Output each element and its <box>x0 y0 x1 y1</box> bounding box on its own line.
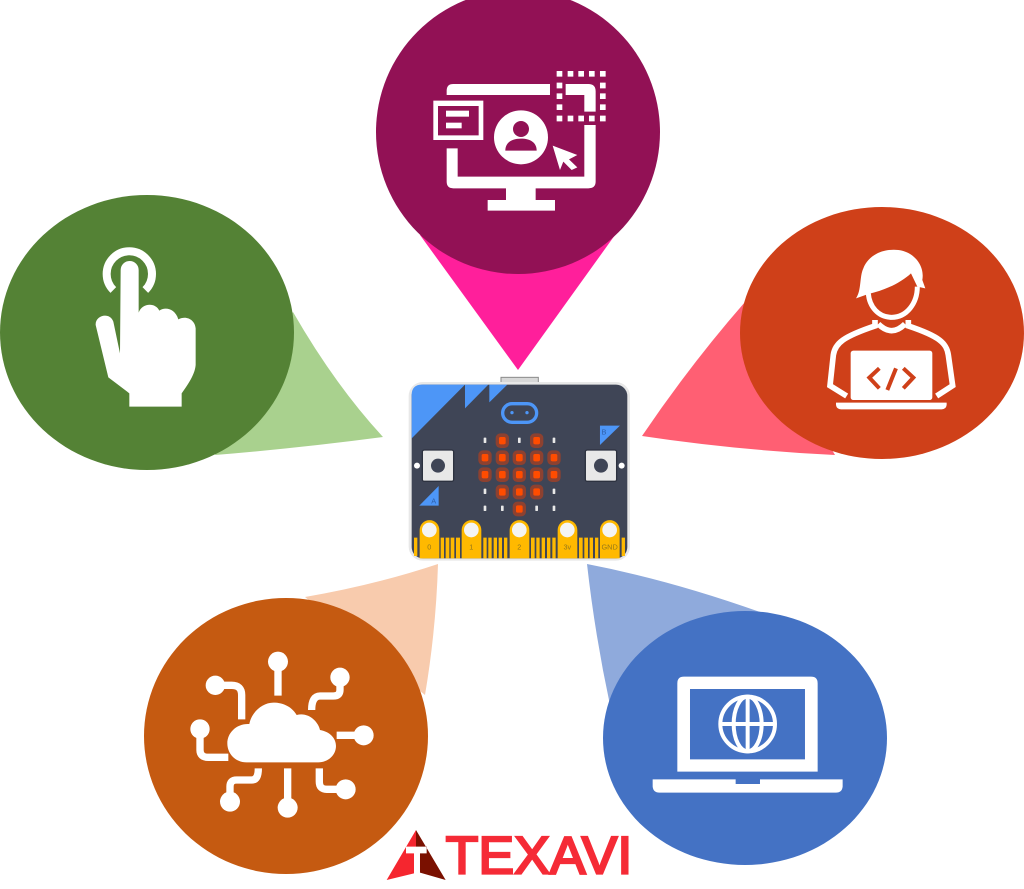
bubble: web laptop <box>587 564 887 865</box>
button A: A <box>431 497 436 506</box>
icon: laptop with globe <box>653 677 843 793</box>
icon: finger tap <box>96 251 196 407</box>
gold edge connector: 0 <box>427 542 431 551</box>
gold edge connector: 3v <box>563 542 572 551</box>
blue corner triangles <box>412 385 507 438</box>
icon: monitor with user and cursor <box>433 71 606 211</box>
LED matrix heart <box>478 433 561 516</box>
icon: connected cloud <box>190 652 374 818</box>
logo wordmark: TEXAVI <box>446 827 632 886</box>
bubble: touch input <box>0 195 383 470</box>
micro:bit board <box>409 377 630 561</box>
bubble: cloud IoT <box>144 564 438 874</box>
button B: B <box>602 427 607 436</box>
button A <box>414 450 454 506</box>
icon: coder at laptop <box>830 250 953 409</box>
gold edge connector: 1 <box>469 542 473 551</box>
gold edge connector: GND <box>601 542 618 551</box>
TEXAVI logo <box>387 827 632 886</box>
logo mark <box>387 830 446 880</box>
gold edge connector <box>414 520 625 558</box>
button B <box>585 426 625 481</box>
bubble: programmer <box>642 207 1024 459</box>
bubble: screen interaction <box>376 0 660 370</box>
gold edge connector: 2 <box>517 542 521 551</box>
logo pill <box>503 404 537 422</box>
